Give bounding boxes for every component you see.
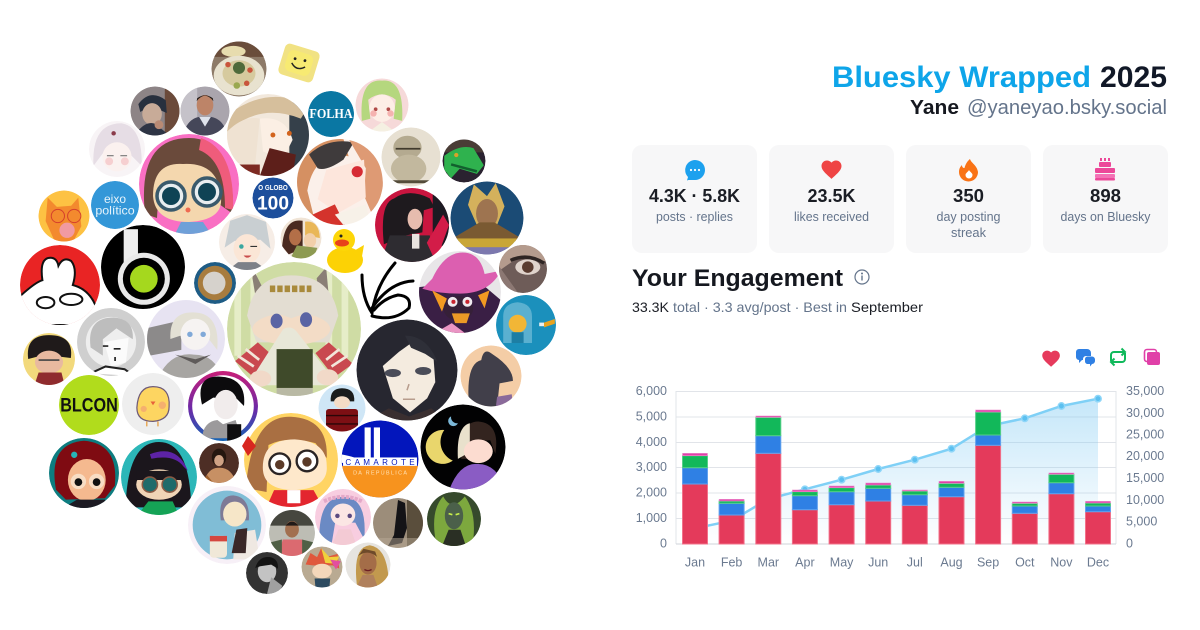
cumulative area [695, 399, 1098, 544]
panel: likes received: 23.5K [808, 186, 856, 206]
right axis labels: 5,000 [1126, 514, 1157, 528]
panel: day posting streak: 350 [953, 186, 984, 206]
month labels: Feb [721, 556, 742, 570]
icon: quotes copy [1144, 350, 1160, 365]
avatar: man in suit [180, 86, 230, 136]
engagement summary: September [851, 299, 923, 315]
avatar: woman red uniform [375, 188, 449, 262]
left axis labels: 0 [660, 536, 667, 550]
icon: speech bubble [685, 160, 705, 180]
panel: days on Bluesky: 898 [1090, 186, 1121, 206]
avatar: rubber duck [327, 229, 364, 273]
panel: likes received: likes received [794, 210, 869, 224]
icon: heart [822, 160, 842, 179]
icon: cake [1095, 158, 1115, 180]
icon: likes heart [1042, 351, 1060, 367]
left axis labels: 2,000 [636, 486, 667, 500]
avatar: Camarote da República: CAMAROTE [345, 458, 415, 467]
avatar cluster [20, 42, 556, 594]
avatar: eixo politico [91, 181, 139, 229]
icon: replies bubbles [1076, 349, 1095, 366]
avatar: orange cat [38, 190, 90, 242]
month labels: Aug [940, 556, 963, 570]
avatar: boy holding jar [188, 486, 266, 564]
avatar: close-up eye [499, 245, 547, 293]
avatar: blond warrior [450, 182, 524, 256]
avatar: eixo politico: político [95, 204, 135, 218]
heading: Your Engagement: Your Engagement [632, 265, 843, 292]
panel: posts and replies: 4.3K · 5.8K [649, 186, 740, 206]
avatar: pale blue-eye girl [147, 300, 225, 378]
avatar: toad sketch [382, 128, 440, 186]
avatar: O Globo 100 [252, 178, 294, 218]
icon: flame [959, 159, 978, 182]
line points [802, 396, 1101, 492]
avatar: BW man portrait [246, 552, 288, 594]
month labels: May [830, 556, 854, 570]
month labels [685, 556, 1109, 570]
avatar: black b logo [101, 225, 185, 309]
avatar: BLCON: BLCON [60, 396, 118, 417]
right axis labels: 35,000 [1126, 384, 1164, 398]
month labels: Jul [907, 556, 923, 570]
panel: day posting streak: day posting [936, 210, 1001, 224]
chart legend [1042, 348, 1160, 367]
right axis labels: 25,000 [1126, 428, 1164, 442]
avatar: moon girl [420, 404, 506, 490]
avatar: FOLHA: FOLHA [309, 106, 353, 121]
avatar: Camarote da República: DA REPÚBLICA [353, 469, 407, 476]
right axis labels: 15,000 [1126, 471, 1164, 485]
avatar: ponytail [460, 346, 522, 406]
grid lines [676, 391, 1116, 544]
left axis labels: 1,000 [636, 511, 667, 525]
avatar: red rabbit [20, 245, 100, 325]
avatar: silver hair boy [219, 214, 275, 270]
right axis labels: 30,000 [1126, 406, 1164, 420]
panel: likes received [769, 145, 894, 253]
panel: days on Bluesky [1043, 145, 1168, 253]
panel: posts and replies [632, 145, 757, 253]
left axis labels [636, 384, 667, 550]
avatar: coffee [194, 262, 236, 304]
avatar: barrel boy [318, 384, 366, 432]
avatar: painting woman [199, 443, 239, 483]
right axis labels: 0 [1126, 536, 1133, 550]
title: Bluesky Wrapped [832, 61, 1091, 94]
avatar: red curly hair girl [49, 438, 119, 508]
left axis labels: 3,000 [636, 460, 667, 474]
avatar: lightbulb in cage [496, 295, 556, 355]
avatar: food plate [212, 42, 266, 96]
avatar: spiky hair chibi [302, 546, 342, 588]
engagement summary: total · 3.3 avg/post · Best in [673, 299, 847, 315]
title: 2025 [1100, 61, 1167, 94]
avatar: dark hair woman [356, 320, 458, 420]
avatar: white hair girl [89, 121, 145, 177]
avatar: chibi with round glasses [242, 413, 338, 507]
avatar: FOLHA [308, 91, 354, 137]
avatar: ravioli smiley [277, 42, 321, 84]
avatar: flower crown girl [315, 489, 371, 545]
month labels: Sep [977, 556, 999, 570]
quotes segments [682, 410, 1110, 503]
avatar detail: red bow [242, 436, 256, 456]
left axis labels: 5,000 [636, 410, 667, 424]
avatar: orange hair girl eyepatch [297, 139, 383, 225]
right axis labels [1126, 384, 1164, 550]
stacked bars [682, 410, 1110, 544]
icon: reposts arrows [1111, 348, 1125, 366]
right axis labels: 20,000 [1126, 449, 1164, 463]
bar and line chart [636, 384, 1164, 570]
right axis labels: 10,000 [1126, 493, 1164, 507]
avatar: eixo politico: eixo [104, 192, 126, 206]
engagement summary: 33.3K [632, 299, 670, 315]
icon: info [855, 270, 869, 284]
left axis labels: 6,000 [636, 384, 667, 398]
avatar: curly hair glasses [23, 333, 75, 385]
left axis labels: 4,000 [636, 435, 667, 449]
month labels: Jan [685, 556, 705, 570]
avatar: black cat photo [373, 498, 423, 548]
avatar: couple [280, 218, 322, 258]
avatar: O Globo 100: 100 [257, 192, 289, 214]
engagement summary [632, 299, 923, 315]
avatar: Camarote da República [342, 420, 418, 498]
avatar: green elf [427, 492, 481, 546]
avatar: O Globo 100: O GLOBO [258, 185, 288, 192]
cumulative line [695, 399, 1098, 528]
avatar: ring portrait woman [188, 371, 258, 441]
month labels: Apr [795, 556, 815, 570]
panel: day posting streak [906, 145, 1031, 253]
avatar: BLCON [59, 375, 119, 435]
avatar: anime man [130, 86, 180, 136]
month labels: Dec [1087, 556, 1109, 570]
reposts segments [682, 412, 1110, 506]
month labels: Mar [758, 556, 779, 570]
avatar: cream hair girl [227, 94, 309, 176]
replies segments [682, 435, 1110, 515]
panel: posts and replies: posts · replies [656, 210, 733, 224]
month labels: Jun [868, 556, 888, 570]
avatar: yellow chick [122, 373, 184, 435]
avatar: brown hair glasses pink ring [139, 134, 239, 234]
avatar: VG signature [362, 263, 413, 318]
avatar: green hair girl [356, 78, 408, 132]
month labels: Nov [1050, 556, 1073, 570]
avatar: green dino [442, 140, 486, 182]
avatar: BW sketch [77, 308, 145, 376]
avatar: blonde woman [346, 542, 390, 588]
likes segments [682, 445, 1110, 544]
month labels: Oct [1015, 556, 1035, 570]
avatar: Shadow in pink hat [419, 251, 501, 333]
user name and handle: @yaneyao.bsky.social [967, 97, 1167, 119]
avatar: man in pink shirt [269, 510, 315, 556]
panel: days on Bluesky: days on Bluesky [1060, 210, 1151, 224]
user name and handle: Yane [910, 97, 959, 119]
avatar: purple-black hair girl [121, 439, 197, 515]
panel: day posting streak: streak [951, 226, 987, 240]
avatar: onigiri girl big [227, 262, 361, 397]
